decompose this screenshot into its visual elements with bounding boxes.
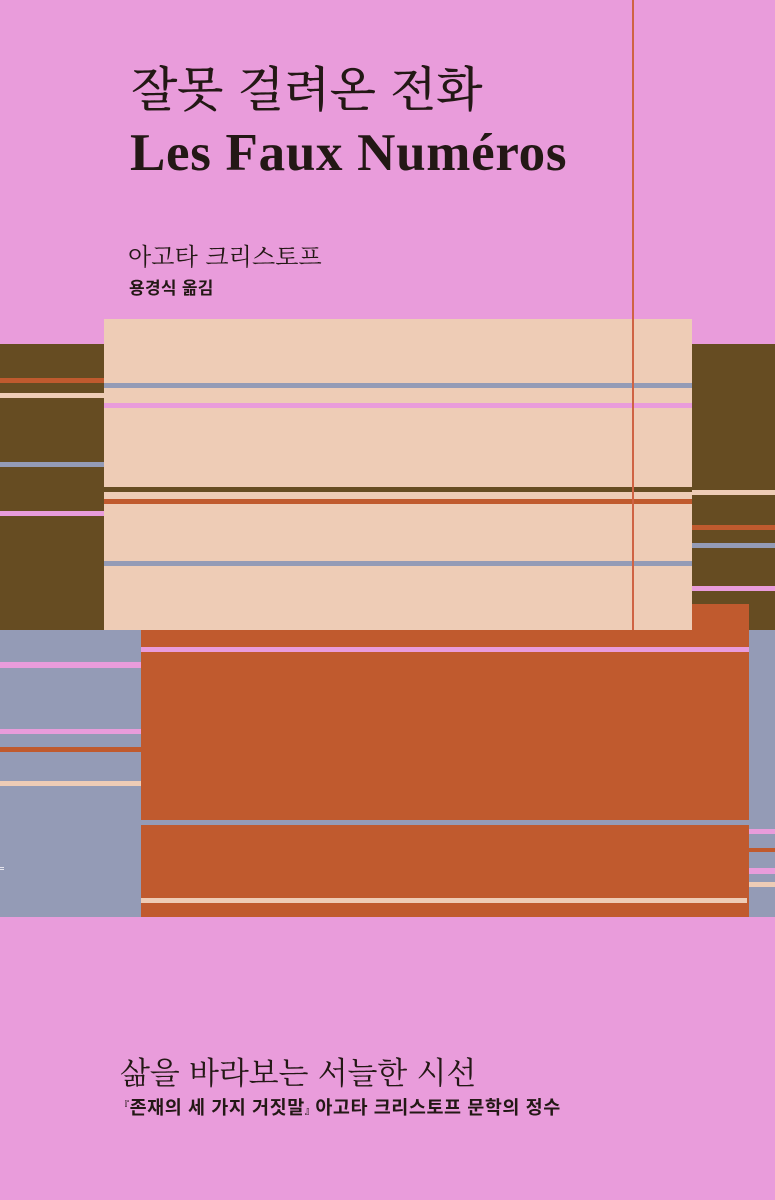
panel: orange block — [141, 604, 749, 917]
vertical orange line — [632, 0, 634, 630]
panel: brown band — [0, 344, 775, 630]
tagline: 삶을 바라보는 서늘한 시선 — [120, 1048, 476, 1093]
panel: slate band — [0, 630, 775, 917]
panel: peach block — [104, 319, 692, 630]
title: French: Les Faux Numéros — [130, 124, 567, 182]
translator: 용경식 옮김 — [129, 279, 214, 298]
author: 아고타 크리스토프 — [128, 237, 322, 272]
subtitle: 『존재의 세 가지 거짓말』아고타 크리스토프 문학의 정수 — [119, 1097, 561, 1118]
title: Korean: 잘못 걸려온 전화 — [131, 51, 482, 120]
